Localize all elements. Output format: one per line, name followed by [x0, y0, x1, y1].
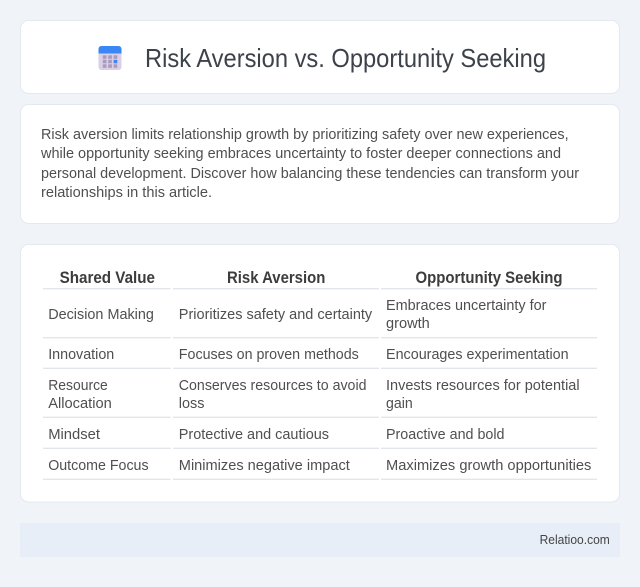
table row: Decision Making: growth: [386, 315, 430, 332]
icon: calendar: [98, 46, 122, 70]
table row: Mindset: Proactive and bold: [386, 426, 504, 443]
table row: Mindset: Mindset: [48, 426, 101, 443]
table row: Resource Allocation: Resource: [48, 377, 108, 394]
table row: Outcome Focus: Minimizes negative impact: [179, 457, 351, 474]
table header: [60, 269, 562, 287]
table row: Innovation: Focuses on proven methods: [179, 346, 359, 363]
table row: Decision Making: Embraces uncertainty for: [386, 297, 546, 314]
table row: Resource Allocation: Allocation: [48, 395, 112, 412]
text block: introduction: [40, 126, 579, 201]
table row: Resource Allocation: [48, 377, 580, 412]
text block: introduction: Risk aversion limits relationship growth by prioritizing safety over new experiences,: [41, 126, 569, 143]
table row: Decision Making: [48, 297, 546, 332]
panel: introduction card: [20, 104, 620, 224]
text block: introduction: while opportunity seeking embraces uncertainty to foster deeper connections and: [40, 145, 561, 162]
table row: Resource Allocation: gain: [386, 395, 413, 412]
text block: introduction: personal development. Discover how balancing these tendencies can transform your: [41, 165, 579, 182]
table row: Outcome Focus: Maximizes growth opportunities: [386, 457, 591, 474]
title: Risk Aversion vs. Opportunity Seeking: [145, 43, 546, 73]
table row: Innovation: [48, 346, 569, 363]
table row: Resource Allocation: Invests resources for potential: [386, 377, 580, 394]
table row: Outcome Focus: [48, 457, 591, 474]
footer credit: Relatioo.com: [540, 533, 610, 547]
footer: [20, 523, 620, 557]
table row: Mindset: [48, 426, 504, 443]
table header: Risk Aversion: [227, 269, 325, 287]
table header: Opportunity Seeking: [416, 269, 562, 287]
panel: title card: [20, 20, 620, 94]
table row: Decision Making: Prioritizes safety and certainty: [179, 306, 373, 323]
table row: Outcome Focus: Outcome Focus: [48, 457, 149, 474]
table row: Decision Making: Decision Making: [48, 306, 154, 323]
table row: Resource Allocation: loss: [179, 395, 204, 412]
panel: comparison table card: [20, 244, 620, 502]
table row: Mindset: Protective and cautious: [179, 426, 329, 443]
table row: Innovation: Encourages experimentation: [386, 346, 569, 363]
text block: introduction: relationships in this article.: [41, 184, 212, 201]
table header: Shared Value: [60, 269, 155, 287]
table row: Resource Allocation: Conserves resources to avoid: [179, 377, 366, 394]
table row: Innovation: Innovation: [48, 346, 114, 363]
